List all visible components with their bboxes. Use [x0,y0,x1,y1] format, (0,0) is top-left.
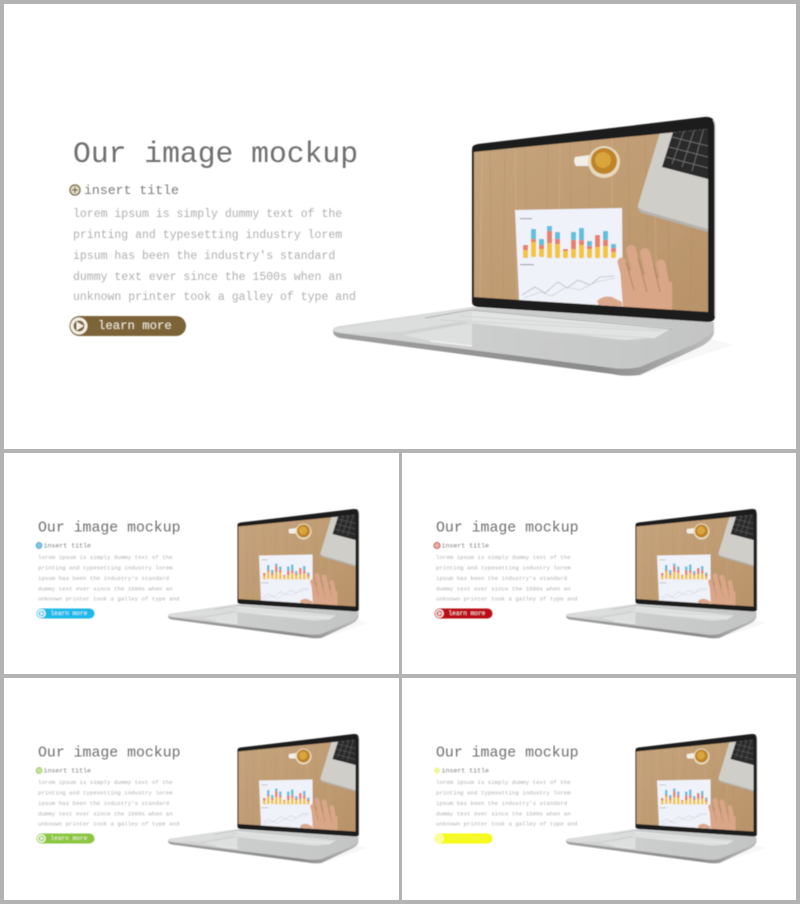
title: Our image mockup [38,520,181,536]
body text: ipsum has been the industry's standard [73,250,335,263]
title: Our image mockup [73,137,358,171]
button: learn more: learn more [50,835,88,842]
button: learn more [70,316,186,336]
button: learn more [36,608,94,618]
body text: dummy text ever since the 1500s when an [38,586,173,592]
slide contents: brown [70,117,733,376]
panel: green slide [4,678,399,900]
body text: ipsum has been the industry's standard [436,800,567,807]
slide contents: blue [36,509,368,638]
button: learn more: learn more [98,319,172,333]
body text: printing and typesetting industry lorem [38,564,173,572]
body text: unknown printer took a galley of type and [38,596,179,602]
button: learn more [36,834,94,844]
body text: lorem ipsum is simply dummy text of the [436,554,571,561]
panel: large brown slide [4,4,796,449]
title: Our image mockup [436,746,579,762]
panel: yellow slide [402,678,796,900]
body text: ipsum has been the industry's standard [38,800,169,807]
body text: unknown printer took a galley of type and [73,291,356,304]
button: learn more [434,834,492,844]
body text: unknown printer took a galley of type and [436,820,577,828]
icon: plus circle [36,768,42,774]
body text [38,554,179,602]
body text: dummy text ever since the 1500s when an [436,586,571,592]
icon: plus circle [434,768,440,774]
body text: printing and typesetting industry lorem [436,790,571,796]
subheading: insert title [84,183,179,198]
title: Our image mockup [436,520,579,536]
body text: dummy text ever since the 1500s when an [38,810,173,818]
body text: dummy text ever since the 1500s when an [436,810,571,818]
body text: printing and typesetting industry lorem [73,229,342,242]
body text: printing and typesetting industry lorem [436,564,571,572]
body text: ipsum has been the industry's standard [436,575,567,582]
slide contents: yellow [434,734,766,864]
laptop mockup [333,117,733,376]
slide contents: red [434,509,766,638]
panel: red slide [402,453,796,674]
subheading: insert title [44,768,91,774]
body text: printing and typesetting industry lorem [38,790,173,796]
body text [436,779,577,828]
body text: ipsum has been the industry's standard [38,575,169,582]
laptop mockup [168,509,368,638]
body text: dummy text ever since the 1500s when an [73,271,342,284]
body text [436,554,577,602]
button: learn more: learn more [448,610,486,617]
icon: plus circle [434,542,440,548]
slide contents: green [36,734,368,864]
button: learn more [434,608,492,618]
icon: plus circle [36,542,42,548]
button: learn more: learn more [50,610,88,617]
icon: plus circle [70,185,80,195]
body text: lorem ipsum is simply dummy text of the [436,779,571,786]
subheading: insert title [44,542,91,550]
title: Our image mockup [38,746,181,762]
laptop mockup [168,734,368,864]
subheading: insert title [442,542,489,550]
body text [73,208,356,304]
laptop mockup [566,509,766,638]
body text: unknown printer took a galley of type and [436,596,577,602]
body text: lorem ipsum is simply dummy text of the [38,554,173,561]
body text: unknown printer took a galley of type and [38,820,179,828]
body text [38,779,179,828]
body text: lorem ipsum is simply dummy text of the [73,208,342,221]
subheading: insert title [442,768,489,774]
panel: blue slide [4,453,399,674]
laptop mockup [566,734,766,864]
button: learn more: learn more [448,835,486,842]
body text: lorem ipsum is simply dummy text of the [38,779,173,786]
